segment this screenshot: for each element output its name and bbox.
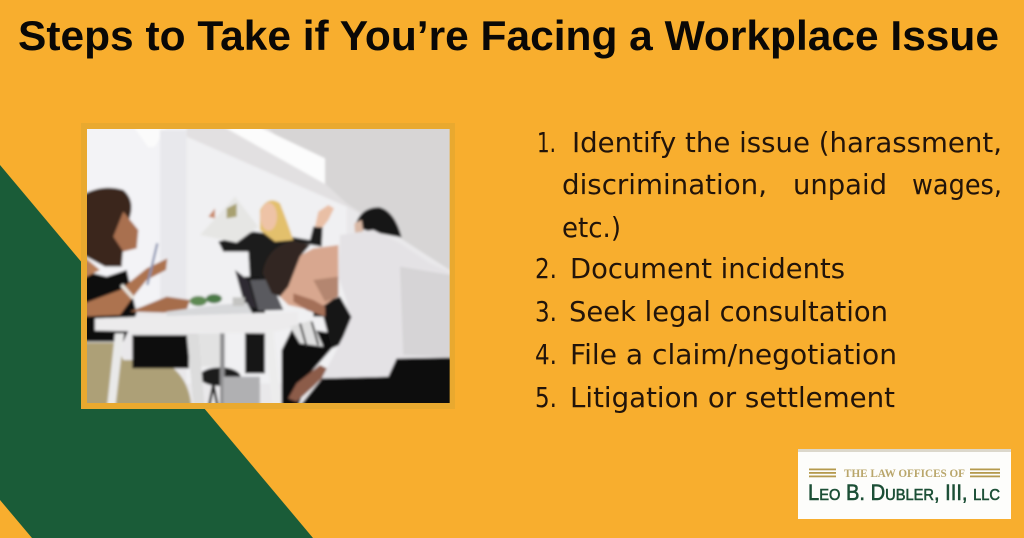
photo: tense office meeting xyxy=(80,120,460,410)
logo left stripes xyxy=(809,468,836,477)
step 5: 5. xyxy=(535,381,557,414)
logo firm name: LEO B. DUBLER, III, LLC xyxy=(808,480,1000,505)
man's arm xyxy=(313,297,353,348)
logo top line: THE LAW OFFICES OF xyxy=(844,466,965,480)
step 1 continued: wages, xyxy=(912,168,1002,201)
photo scene xyxy=(80,120,460,410)
step 1 continued: discrimination, xyxy=(562,168,767,201)
step 1 end: etc.) xyxy=(562,211,621,244)
second seated woman xyxy=(355,207,402,237)
numbered steps list xyxy=(535,126,1002,414)
table xyxy=(95,312,298,333)
green diagonal band xyxy=(0,165,313,538)
woman seated xyxy=(80,270,137,342)
step 5: Litigation or settlement xyxy=(570,381,895,414)
step 1: 1. xyxy=(537,126,556,159)
step 3: 3. xyxy=(535,295,557,328)
laptop xyxy=(235,270,257,308)
photo frame xyxy=(81,123,455,409)
law office logo xyxy=(798,449,1011,519)
step 4: File a claim/negotiation xyxy=(570,338,897,371)
step 1: Identify the issue (harassment, xyxy=(572,126,1002,159)
step 2: Document incidents xyxy=(570,252,845,285)
logo right stripes xyxy=(970,468,1000,477)
step 4: 4. xyxy=(535,338,557,371)
man in white shirt, dark trousers xyxy=(282,327,333,410)
dark chair and stool xyxy=(132,335,189,368)
step 1 continued: unpaid xyxy=(793,168,887,201)
step 3: Seek legal consultation xyxy=(569,295,888,328)
man's head xyxy=(277,245,338,310)
step 2: 2. xyxy=(535,252,557,285)
logo background xyxy=(798,449,1011,519)
plant and papers xyxy=(190,296,207,306)
woman standing xyxy=(218,227,323,280)
title: Steps to Take if You’re Facing a Workplace Issue xyxy=(18,12,999,59)
